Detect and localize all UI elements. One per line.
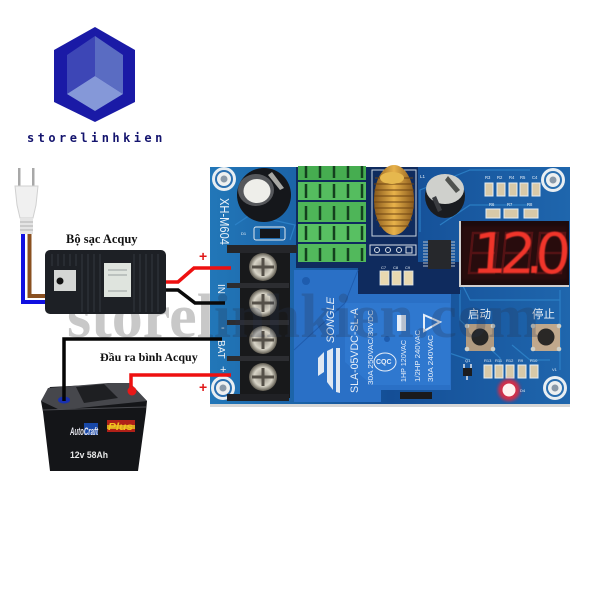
capacitor large <box>237 168 291 222</box>
resistor labels: R5 <box>520 175 526 180</box>
capacitor small <box>425 174 465 218</box>
dark area under heatsink and inductor <box>296 167 460 294</box>
seven segment display: 12.0 <box>470 222 573 287</box>
resistor labels: R4 <box>509 175 515 180</box>
capacitors C7 C8 C9: C7 <box>381 265 387 270</box>
IC chip <box>423 240 455 269</box>
relay markings <box>325 296 435 393</box>
charger label: Bộ sạc Acquy <box>66 232 138 246</box>
terminal block <box>227 245 297 401</box>
resistor labels <box>485 175 538 207</box>
inductor L1: L1 <box>420 174 426 179</box>
resistor labels: R6 <box>489 202 495 207</box>
black wire charger negative <box>166 290 225 303</box>
red wire charger positive <box>166 268 231 282</box>
power plug <box>15 168 38 234</box>
battery output label: Đầu ra bình Acquy <box>100 350 198 364</box>
relay markings: CQC <box>376 359 392 366</box>
watermark text: storelinhkien.com <box>67 283 539 351</box>
button labels <box>468 307 555 321</box>
circuit board: XH-M604 <box>210 165 573 407</box>
relay markings: 30A 250VAC/30VDC <box>366 309 375 385</box>
LED <box>498 379 526 401</box>
terminal labels: - <box>221 322 225 334</box>
terminal labels: BAT <box>215 340 226 359</box>
diode D1: D1 <box>241 231 247 236</box>
bottom resistor labels: R13 <box>484 358 492 363</box>
bottom resistor labels: R9 <box>518 358 524 363</box>
terminal labels <box>215 284 226 376</box>
battery: 12v 58Ah <box>70 450 108 460</box>
plus sign in: + <box>199 248 207 264</box>
resistor labels: R2 <box>497 175 503 180</box>
screws <box>249 253 277 391</box>
push button left <box>465 324 495 351</box>
green heatsink <box>298 166 366 262</box>
button labels: 停止 <box>532 307 555 321</box>
battery <box>41 383 147 471</box>
battery brand labels: AutoCraft <box>69 426 99 438</box>
mains wires <box>23 234 46 302</box>
bottom resistor labels: R12 <box>506 358 514 363</box>
relay markings: 30A 240VAC <box>426 334 435 382</box>
resistor labels: R7 <box>507 202 513 207</box>
battery brand labels: Plus <box>108 422 134 433</box>
bottom resistor labels: R11 <box>495 358 503 363</box>
inductor L1 <box>372 165 426 236</box>
watermark overlay on board: storelinhkien.com <box>67 283 539 351</box>
black wire battery negative <box>64 339 222 401</box>
mounting holes <box>211 167 567 400</box>
bottom resistor labels <box>484 358 558 372</box>
red wire battery positive <box>131 375 231 390</box>
relay markings: 1HP 120VAC <box>399 339 408 382</box>
resistors bottom row <box>484 365 538 378</box>
diode D1 <box>241 227 285 240</box>
push button right <box>531 324 561 351</box>
terminal labels: + <box>220 364 226 376</box>
header pins <box>370 245 416 255</box>
bottom resistor labels: V1 <box>552 367 558 372</box>
terminal labels: IN <box>215 284 226 294</box>
capacitors C7 C8 C9: C8 <box>393 265 399 270</box>
resistors top right <box>485 183 540 218</box>
resistor labels: R3 <box>485 175 491 180</box>
battery red terminal <box>128 386 136 396</box>
board model label: XH-M604 <box>217 198 231 245</box>
brand name: storelinhkien <box>27 131 166 145</box>
capacitors C7 C8 C9 <box>380 265 413 285</box>
battery brand labels <box>69 420 135 438</box>
LED: D4 <box>520 388 526 393</box>
resistor labels: C4 <box>532 175 538 180</box>
charger <box>45 250 166 314</box>
battery blue terminal <box>58 396 70 404</box>
resistor labels: R8 <box>527 202 533 207</box>
relay logo stripes <box>318 348 340 393</box>
relay markings: SLA-05VDC-SL-A <box>349 307 361 393</box>
logo: storelinhkien hexagon <box>54 27 135 122</box>
relay markings: 1/2HP 240VAC <box>413 329 422 382</box>
part below relay <box>400 392 432 399</box>
transistor Q1 <box>463 358 472 380</box>
transistor Q1: Q1 <box>465 358 471 363</box>
bottom resistor labels: R10 <box>530 358 538 363</box>
capacitors C7 C8 C9: C9 <box>405 265 411 270</box>
plus sign bat: + <box>199 379 207 395</box>
button labels: 启动 <box>468 308 491 321</box>
relay SONGLE <box>294 270 451 402</box>
relay markings: SONGLE <box>325 296 337 343</box>
